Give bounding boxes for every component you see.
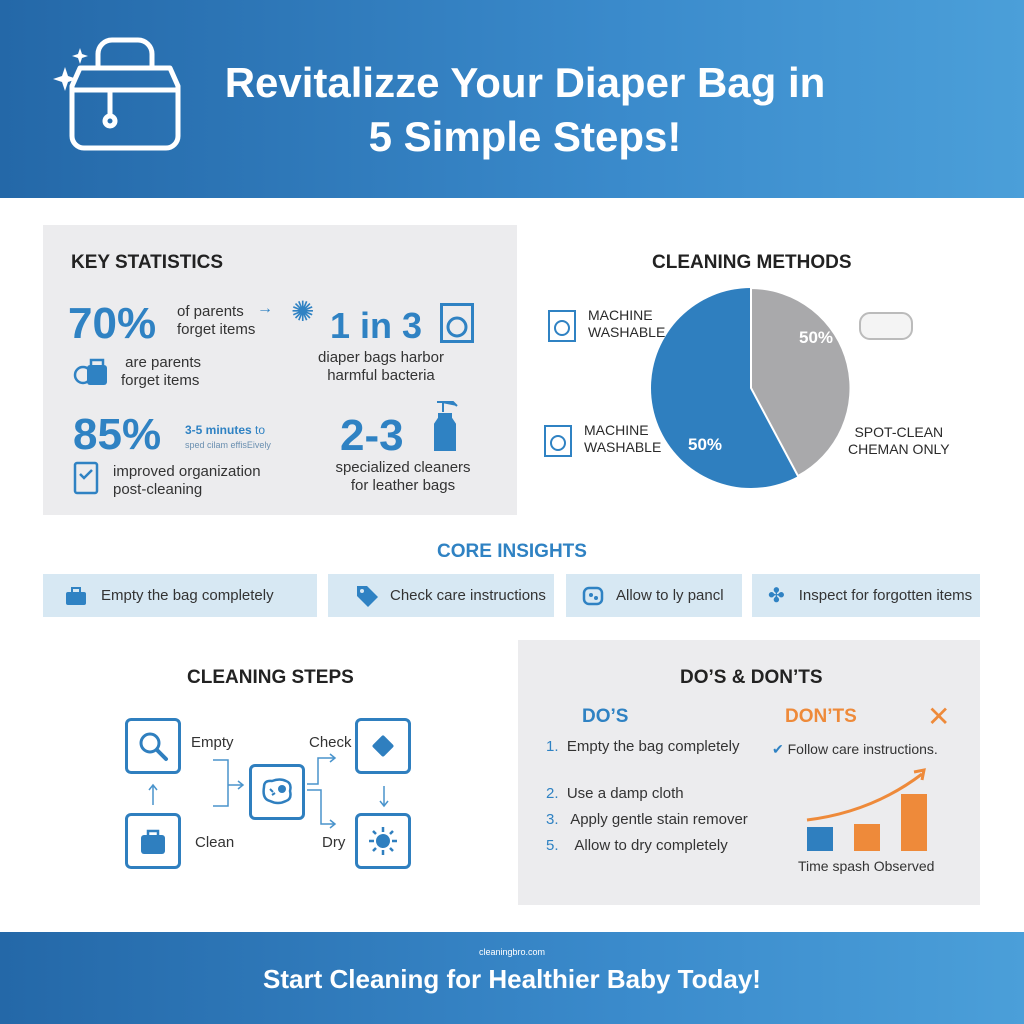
icon: clipboard xyxy=(74,462,98,494)
panel: key statistics xyxy=(43,225,517,515)
legend: machine washable 2: MACHINE xyxy=(584,422,649,438)
panel: key statistics: diaper bags harbor xyxy=(318,349,444,366)
title xyxy=(225,59,825,160)
panel: key statistics: specialized cleaners xyxy=(335,459,471,476)
step: search xyxy=(125,718,181,774)
panel: key statistics: sped cilam effisEively xyxy=(185,440,271,450)
do's column: 5. Allow to dry completely xyxy=(546,837,728,854)
do's column: 3. Apply gentle stain remover xyxy=(546,811,748,828)
legend: machine washable 2 xyxy=(544,422,661,457)
icon: sponge xyxy=(859,312,913,340)
insight 4 xyxy=(752,574,980,617)
don'ts column xyxy=(772,701,950,874)
title: 5 Simple Steps! xyxy=(369,113,681,160)
don'ts column: ✔ Follow care instructions. xyxy=(772,741,938,757)
legend: machine washable xyxy=(548,307,665,342)
icon: spray bottle xyxy=(434,401,458,451)
icon: washing machine xyxy=(440,303,474,343)
panel: cleaning steps xyxy=(43,640,509,905)
insight 2 xyxy=(328,574,554,617)
panel: key statistics: post-cleaning xyxy=(113,481,202,498)
legend: machine washable: MACHINE xyxy=(588,307,653,323)
insight 1 xyxy=(43,574,317,617)
legend: spot-clean: CHEMAN ONLY xyxy=(848,441,950,457)
panel: key statistics: are parents xyxy=(125,354,201,371)
don'ts column: DON’TS xyxy=(785,706,857,727)
pie chart xyxy=(651,288,850,488)
panel: key statistics: improved organization xyxy=(113,463,261,480)
panel: cleaning steps: Dry xyxy=(322,834,345,851)
insight 4: ✤ xyxy=(768,585,785,607)
panel: key statistics: forget items xyxy=(121,372,199,389)
panel: cleaning steps: Check xyxy=(309,734,352,751)
do's column: 1. Empty the bag completely xyxy=(546,738,739,755)
step: sponge center xyxy=(249,764,305,820)
don'ts column: Time spash Observed xyxy=(798,858,934,874)
heading: DO’S & DON’TS xyxy=(680,667,823,688)
icon: diaper bag xyxy=(53,38,180,150)
step: dry xyxy=(355,813,411,869)
stat 70%: 70% xyxy=(68,299,156,348)
insight 4: Inspect for forgotten items xyxy=(799,587,972,604)
pie chart: 50% xyxy=(799,328,833,347)
insight 3: Allow to ly pancl xyxy=(616,587,724,604)
do's column: 2. Use a damp cloth xyxy=(546,785,684,802)
pie chart: 50% xyxy=(688,435,722,454)
icon: bacteria: ✺ xyxy=(291,296,314,327)
title: Revitalizze Your Diaper Bag in xyxy=(225,59,825,106)
panel: cleaning steps: Clean xyxy=(195,834,234,851)
panel: key statistics: for leather bags xyxy=(351,477,455,494)
stat 2-3: 2-3 xyxy=(340,411,404,460)
step: bag xyxy=(125,813,181,869)
panel: key statistics: harmful bacteria xyxy=(327,367,435,384)
panel: key statistics: forget items xyxy=(177,321,255,338)
arrows xyxy=(148,754,388,828)
panel: key statistics: → xyxy=(257,300,273,317)
legend: machine washable 2: WASHABLE xyxy=(584,439,661,455)
panel: key statistics: of parents xyxy=(177,303,244,320)
don'ts column: ✕ xyxy=(927,701,950,732)
icon: bag xyxy=(74,358,107,385)
do's column xyxy=(546,706,748,854)
panel: cleaning methods xyxy=(530,225,980,515)
heading: KEY STATISTICS xyxy=(71,252,223,273)
heading: CLEANING STEPS xyxy=(187,667,354,688)
step: check xyxy=(355,718,411,774)
insight 3 xyxy=(566,574,742,617)
panel: key statistics: 3-5 minutes to xyxy=(185,423,265,437)
header banner xyxy=(0,0,1024,198)
labels: Empty xyxy=(191,734,234,751)
insight 1: Empty the bag completely xyxy=(101,587,274,604)
legend: spot-clean xyxy=(848,424,950,457)
footer banner xyxy=(0,932,1024,1024)
do's column: DO’S xyxy=(582,706,628,727)
stat 85%: 85% xyxy=(73,410,161,459)
source: cleaningbro.com xyxy=(479,947,545,957)
call to action: Start Cleaning for Healthier Baby Today! xyxy=(263,964,761,994)
heading: CLEANING METHODS xyxy=(652,252,852,273)
bar chart xyxy=(806,768,927,851)
stat 1 in 3: 1 in 3 xyxy=(330,305,422,346)
legend: machine washable: WASHABLE xyxy=(588,324,665,340)
insight 2: Check care instructions xyxy=(390,587,546,604)
legend: spot-clean: SPOT-CLEAN xyxy=(854,424,943,440)
heading: core insights: CORE INSIGHTS xyxy=(437,541,587,562)
panel: do's and don'ts xyxy=(518,640,980,905)
